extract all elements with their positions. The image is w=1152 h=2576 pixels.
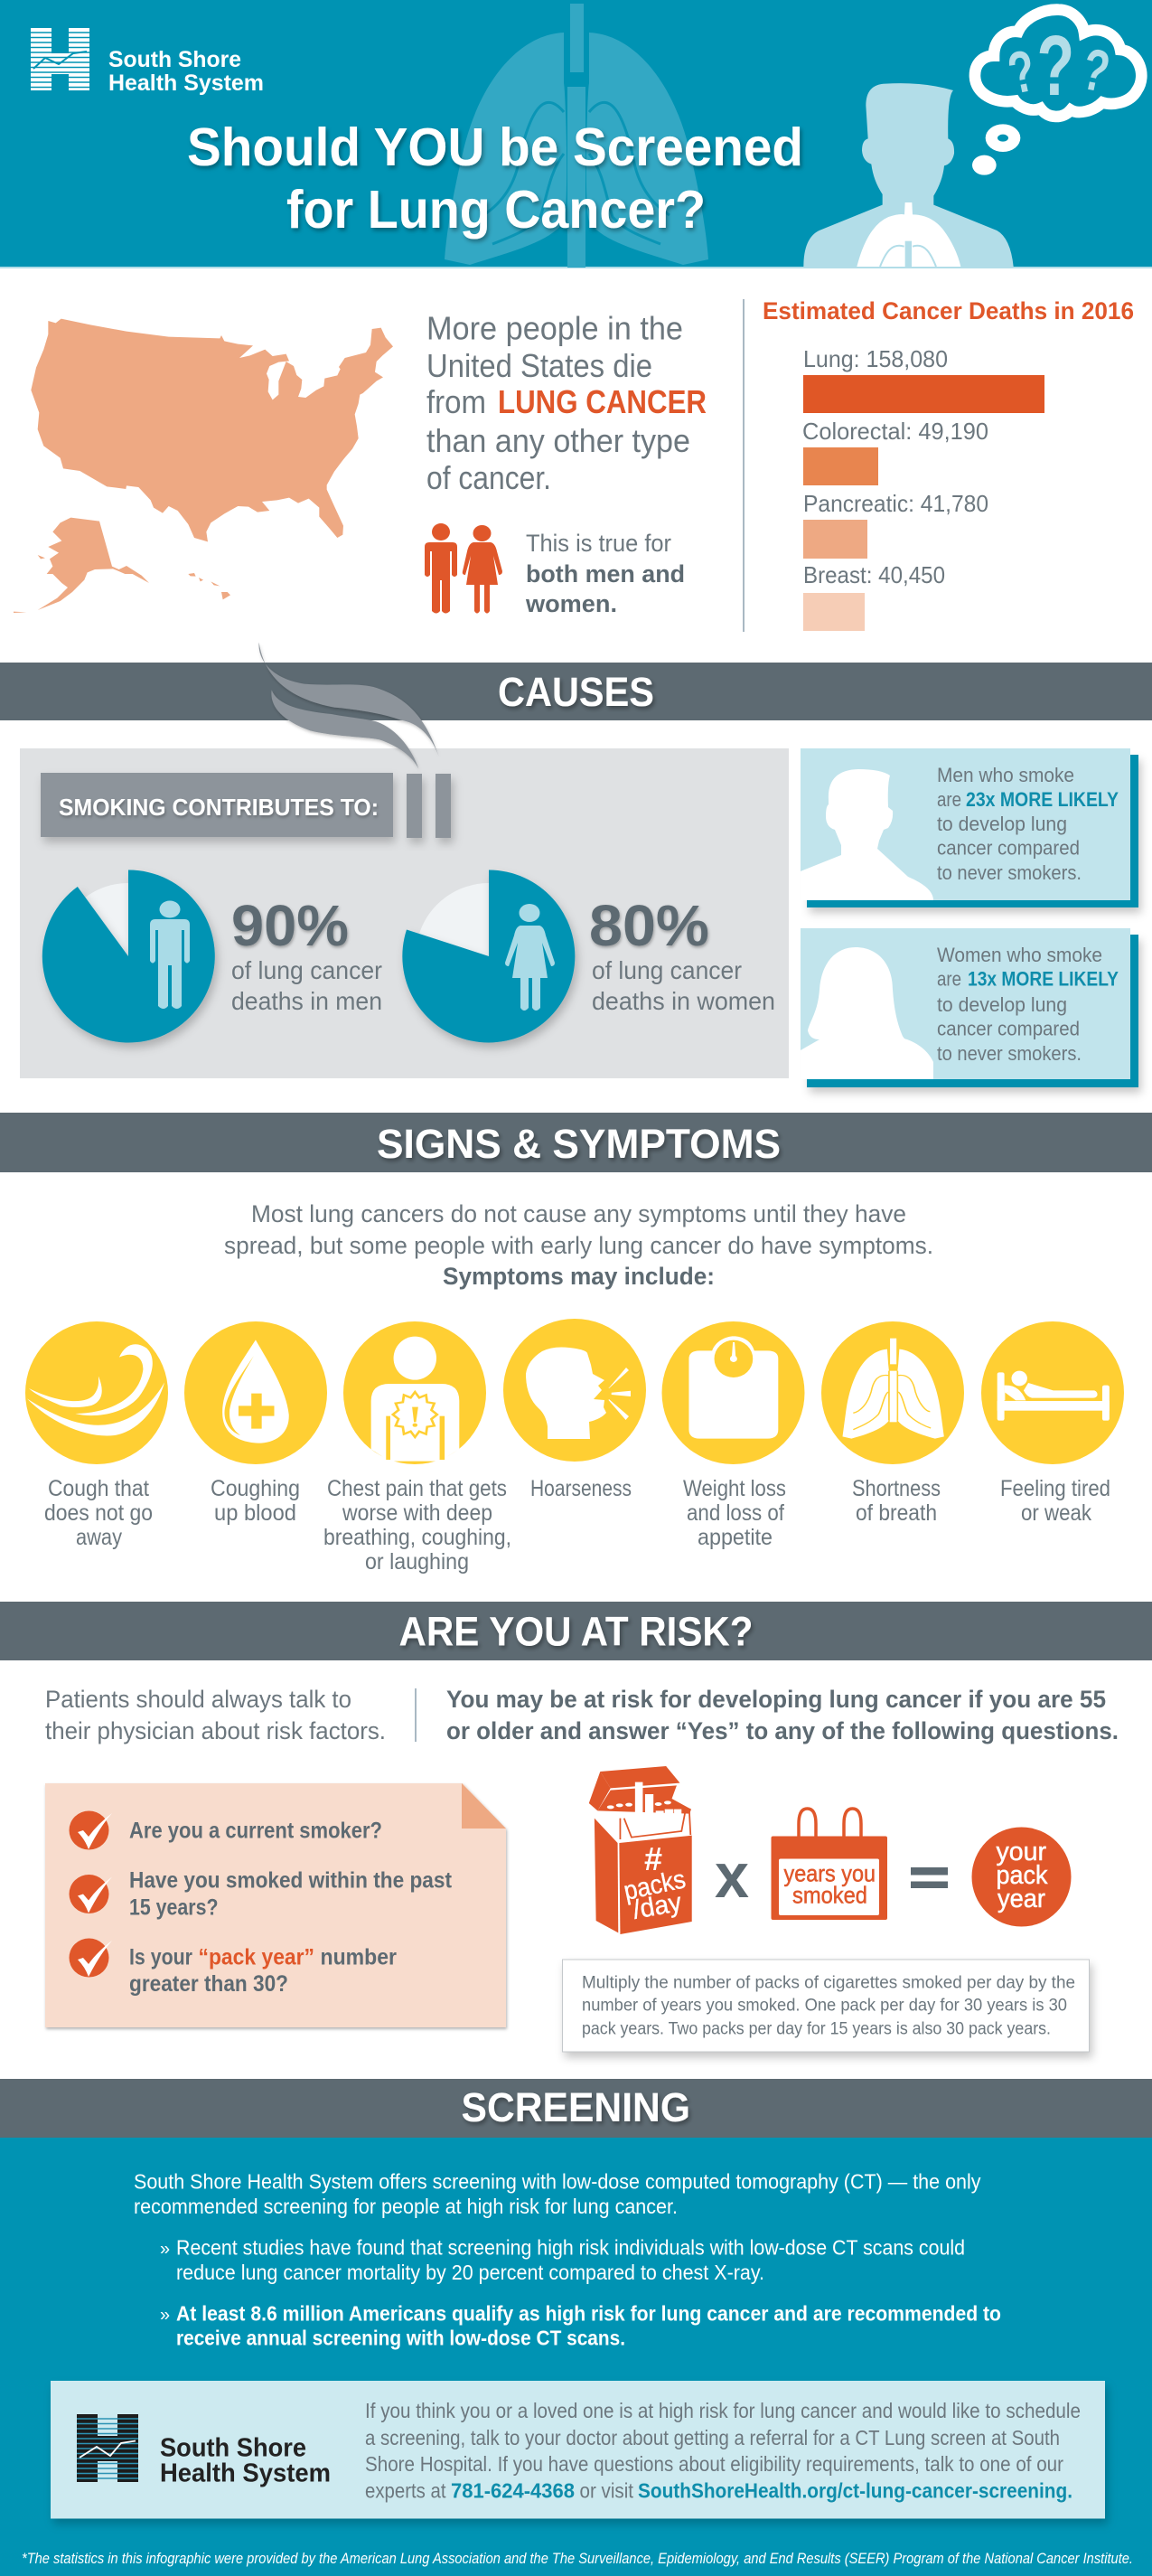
panel: women who smoke: Women who smoke <box>937 944 1102 966</box>
symptoms intro text: Most lung cancers do not cause any symptoms until they have <box>251 1200 906 1227</box>
symptom: feeling tired <box>981 1321 1124 1526</box>
header banner <box>0 0 1152 268</box>
symptom: chest pain <box>323 1321 511 1575</box>
check: current smoker: Are you a current smoker? <box>129 1819 382 1844</box>
bar chart: estimated cancer deaths: Colorectal: 49,190 <box>802 418 988 445</box>
lung cancer statement: More people in the <box>426 309 683 347</box>
icon: cigarette pack: /day <box>631 1888 684 1925</box>
symptoms intro text: spread, but some people with early lung cancer do have symptoms. <box>224 1232 933 1259</box>
your pack year circle: year <box>997 1885 1045 1913</box>
bar chart: estimated cancer deaths: Estimated Cancer Deaths in 2016 <box>763 297 1134 324</box>
lung cancer statement <box>426 309 707 496</box>
symptom: hoarseness <box>503 1319 646 1501</box>
stat: 90 percent: of lung cancer <box>231 956 382 984</box>
contact text: SouthShoreHealth.org/ct-lung-cancer-screening. <box>638 2478 1072 2502</box>
check: pack year greater than 30: Is your <box>129 1945 192 1970</box>
pack year explanation box: pack years. Two packs per day for 15 years is also 30 pack years. <box>582 2019 1051 2039</box>
panel: men who smoke: are <box>937 788 961 811</box>
panel: women who smoke: are <box>937 967 961 991</box>
icon: cigarette pack <box>589 1766 692 1934</box>
panel: men who smoke: to never smokers. <box>937 861 1082 884</box>
lung cancer statement: LUNG CANCER <box>498 383 707 420</box>
screening paragraph: South Shore Health System offers screening with low-dose computed tomography (CT) — the only <box>134 2169 981 2193</box>
symptoms intro text: Symptoms may include: <box>443 1263 715 1290</box>
stat: 90 percent: 90% <box>231 893 349 958</box>
bullet: 8.6 million Americans <box>160 2301 1001 2350</box>
causes heading bar <box>0 663 1152 720</box>
panel: women who smoke: to develop lung <box>937 993 1067 1016</box>
contact text: Shore Hospital. If you have questions about eligibility requirements, talk to one of our <box>365 2452 1063 2476</box>
check: current smoker <box>69 1811 382 1849</box>
bullet: 8.6 million Americans: receive annual screening with low-dose CT scans. <box>176 2327 625 2350</box>
check: smoked within past 15 years: 15 years? <box>129 1894 219 1920</box>
symptom: cough <box>25 1321 168 1550</box>
lung cancer statement: of cancer. <box>426 459 551 496</box>
stat: 90 percent <box>231 893 382 1015</box>
screening paragraph: recommended screening for people at high risk for lung cancer. <box>134 2195 678 2218</box>
contact text: a screening, talk to your doctor about getting a referral for a CT Lung screen at South <box>365 2426 1060 2449</box>
contact text <box>365 2399 1081 2502</box>
physician note <box>45 1686 386 1744</box>
check: smoked within past 15 years <box>69 1867 453 1920</box>
equals sign <box>911 1867 948 1888</box>
check: smoked within past 15 years: Have you smoked within the past <box>129 1867 453 1893</box>
icon: man and woman <box>425 523 502 613</box>
thought cloud with question marks: ? <box>1076 35 1115 105</box>
pack year explanation box <box>562 1960 1090 2052</box>
symptom: chest pain: or laughing <box>365 1549 469 1575</box>
symptom: cough: Cough that <box>48 1476 149 1501</box>
lung cancer statement: from <box>426 383 486 420</box>
both men and women text: women. <box>525 590 617 617</box>
South Shore logo, white <box>31 28 264 96</box>
panel: women who smoke <box>801 928 1138 1087</box>
title: for Lung Cancer? <box>286 180 706 240</box>
panel: smoking contributes <box>20 748 789 1078</box>
pack year explanation box: number of years you smoked. One pack per day for 30 years is 30 <box>582 1996 1067 2016</box>
icon: cigarette pack: # <box>644 1840 662 1877</box>
stat: 90 percent: deaths in men <box>231 987 382 1015</box>
checklist note <box>45 1783 506 2027</box>
smoking cigarette heading: SMOKING CONTRIBUTES TO: <box>59 794 379 821</box>
symptom: shortness of breath: Shortness <box>852 1476 941 1501</box>
bullet: recent studies: » <box>160 2240 170 2260</box>
panel: women who smoke: to never smokers. <box>937 1042 1082 1065</box>
symptom: cough: away <box>76 1525 122 1550</box>
title: Should YOU be Screened <box>187 118 803 177</box>
both men and women text: This is true for <box>526 530 671 557</box>
risk statement: or older and answer “Yes” to any of the following questions. <box>446 1717 1119 1744</box>
symptom: feeling tired: or weak <box>1021 1500 1091 1526</box>
panel: women who smoke: 13x MORE LIKELY <box>968 967 1119 991</box>
check: pack year greater than 30: number <box>320 1945 397 1970</box>
panel: men who smoke: cancer compared <box>937 837 1080 859</box>
South Shore logo, dark: Health System <box>160 2458 331 2487</box>
symptom: shortness of breath: of breath <box>856 1500 937 1526</box>
panel: men who smoke: Men who smoke <box>937 764 1074 786</box>
thought cloud with question marks: ? <box>1002 37 1041 107</box>
bullet: 8.6 million Americans: » <box>160 2305 170 2325</box>
screening heading bar <box>0 2079 1152 2138</box>
icon: calendar bag years smoked: smoked <box>792 1882 867 1909</box>
symptom: chest pain: breathing, coughing, <box>323 1525 511 1550</box>
your pack year circle: pack <box>996 1861 1048 1890</box>
bar chart: estimated cancer deaths <box>763 297 1134 631</box>
stat: 80 percent <box>589 893 775 1015</box>
risk statement <box>446 1686 1119 1744</box>
South Shore logo, dark: South Shore <box>160 2433 306 2462</box>
bullet: 8.6 million Americans: At least 8.6 million Americans qualify as high risk for lung cancer and are recommended to <box>176 2301 1001 2325</box>
symptom: feeling tired: Feeling tired <box>1000 1476 1110 1501</box>
signs and symptoms heading bar: SIGNS & SYMPTOMS <box>377 1121 781 1167</box>
symptom: weight loss: Weight loss <box>683 1476 786 1501</box>
contact panel <box>51 2381 1105 2518</box>
are you at risk heading bar: ARE YOU AT RISK? <box>399 1609 754 1654</box>
both men and women text <box>525 530 685 617</box>
screening section background <box>0 2138 1152 2576</box>
title <box>187 118 803 240</box>
are you at risk heading bar <box>0 1602 1152 1660</box>
both men and women text: both men and <box>526 560 685 588</box>
map of the United States <box>14 319 393 613</box>
symptom: coughing up blood <box>184 1321 327 1526</box>
risk statement: You may be at risk for developing lung cancer if you are 55 <box>446 1686 1106 1713</box>
symptom: cough: does not go <box>44 1500 153 1526</box>
icon: cigarette pack: packs <box>622 1865 688 1906</box>
icon: calendar bag years smoked: years you <box>784 1860 876 1887</box>
check: pack year greater than 30: “pack year” <box>199 1945 314 1970</box>
bar chart: estimated cancer deaths: Pancreatic: 41,780 <box>803 490 988 517</box>
South Shore logo, dark <box>77 2414 331 2487</box>
lung cancer statement: than any other type <box>426 422 690 459</box>
panel: men who smoke <box>801 748 1138 907</box>
bullet: recent studies <box>160 2236 965 2284</box>
background lungs illustration <box>445 4 708 268</box>
smoke rising from cigarette <box>259 643 439 769</box>
South Shore logo, white: Health System <box>108 71 264 96</box>
stat: 80 percent: of lung cancer <box>592 956 742 984</box>
bar chart: estimated cancer deaths: Breast: 40,450 <box>803 561 945 588</box>
symptom: hoarseness: Hoarseness <box>530 1476 632 1501</box>
physician note: Patients should always talk to <box>45 1686 351 1713</box>
panel: men who smoke: to develop lung <box>937 813 1067 835</box>
thought cloud with question marks <box>972 10 1141 175</box>
stat: 80 percent: deaths in women <box>592 987 775 1015</box>
bullet: recent studies: Recent studies have found that screening high risk individuals with low-dose CT scans could <box>176 2236 965 2260</box>
smoking cigarette heading <box>41 773 451 838</box>
symptom: weight loss <box>661 1321 804 1550</box>
pie chart: 90 percent men <box>42 870 215 1042</box>
bar chart: estimated cancer deaths: Lung: 158,080 <box>803 345 948 372</box>
multiply sign: x <box>715 1840 749 1911</box>
symptom: weight loss: and loss of <box>687 1500 784 1526</box>
panel: women who smoke: cancer compared <box>937 1018 1080 1039</box>
South Shore logo, white: South Shore <box>108 47 241 72</box>
man silhouette with lungs <box>803 83 1014 267</box>
symptom: chest pain: worse with deep <box>342 1500 492 1526</box>
symptom: coughing up blood: up blood <box>214 1500 296 1526</box>
contact text: If you think you or a loved one is at high risk for lung cancer and would like to schedule <box>365 2399 1081 2422</box>
symptom: coughing up blood: Coughing <box>211 1476 300 1501</box>
screening paragraph <box>134 2169 981 2218</box>
your pack year circle <box>972 1828 1072 1927</box>
pack year explanation box: Multiply the number of packs of cigarettes smoked per day by the <box>582 1972 1075 1992</box>
causes heading bar: CAUSES <box>498 669 654 715</box>
lung cancer statement: United States die <box>426 347 652 384</box>
contact text: experts at <box>365 2478 446 2502</box>
symptoms intro text <box>224 1200 933 1290</box>
contact text: or visit <box>580 2478 634 2502</box>
bullet: recent studies: reduce lung cancer mortality by 20 percent compared to chest X-ray. <box>176 2261 764 2284</box>
man silhouette <box>801 769 933 900</box>
contact text: 781-624-4368 <box>451 2478 575 2502</box>
check: pack year greater than 30 <box>69 1938 397 1997</box>
physician note: their physician about risk factors. <box>45 1717 386 1744</box>
signs and symptoms heading bar <box>0 1113 1152 1172</box>
panel: men who smoke: 23x MORE LIKELY <box>966 788 1119 811</box>
icon: calendar bag years smoked <box>772 1809 887 1920</box>
check: pack year greater than 30: greater than 30? <box>129 1971 288 1997</box>
thought cloud with question marks: ? <box>1036 18 1074 114</box>
stat: 80 percent: 80% <box>589 893 709 958</box>
pie chart: 80 percent women <box>402 870 575 1042</box>
symptom: weight loss: appetite <box>698 1525 773 1550</box>
screening heading bar: SCREENING <box>461 2084 690 2130</box>
your pack year circle: your <box>996 1838 1046 1866</box>
symptom: chest pain: Chest pain that gets <box>327 1476 507 1501</box>
symptom: shortness of breath <box>821 1321 964 1526</box>
woman silhouette <box>801 947 933 1079</box>
